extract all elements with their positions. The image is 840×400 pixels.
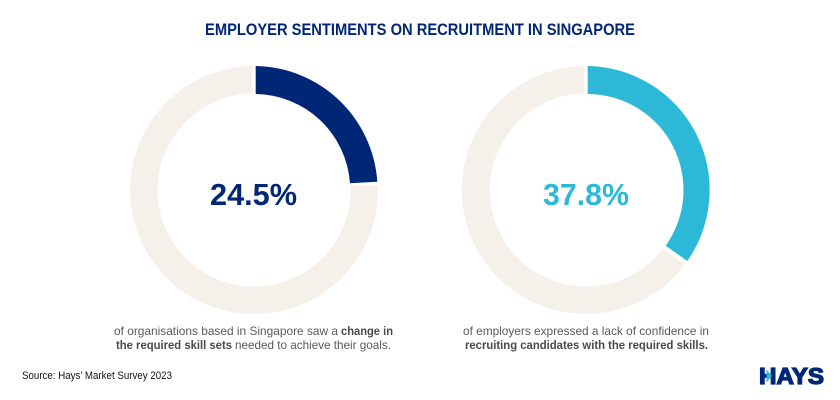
text block: right caption [463,324,709,352]
donut remainder segment left [130,66,378,314]
logo: Hays: HAYS [759,363,824,389]
text block: left caption: of organisations based in Singapore saw a [114,324,338,338]
donut remainder segment right [462,66,685,314]
source note: Source: Hays’ Market Survey 2023 [22,370,172,382]
panel: right donut 37.8% [462,66,710,314]
text block: left caption: needed to achieve their goals. [235,338,391,352]
text block: left caption [114,324,393,352]
donut value segment left [256,66,377,183]
text block: right caption: recruiting candidates with the required skills. [465,338,708,352]
icon: logo arrow [766,370,772,382]
panel: left donut 24.5% [130,66,378,314]
text block: left caption: change in [341,324,393,338]
donut value segment right [588,66,710,261]
text block: left caption: the required skill sets [116,338,232,352]
title: EMPLOYER SENTIMENTS ON RECRUITMENT IN SINGAPORE [205,21,635,39]
value: 24.5%: 24.5% [210,177,297,212]
value: 37.8%: 37.8% [543,177,629,212]
text block: right caption: of employers expressed a lack of confidence in [463,324,709,338]
